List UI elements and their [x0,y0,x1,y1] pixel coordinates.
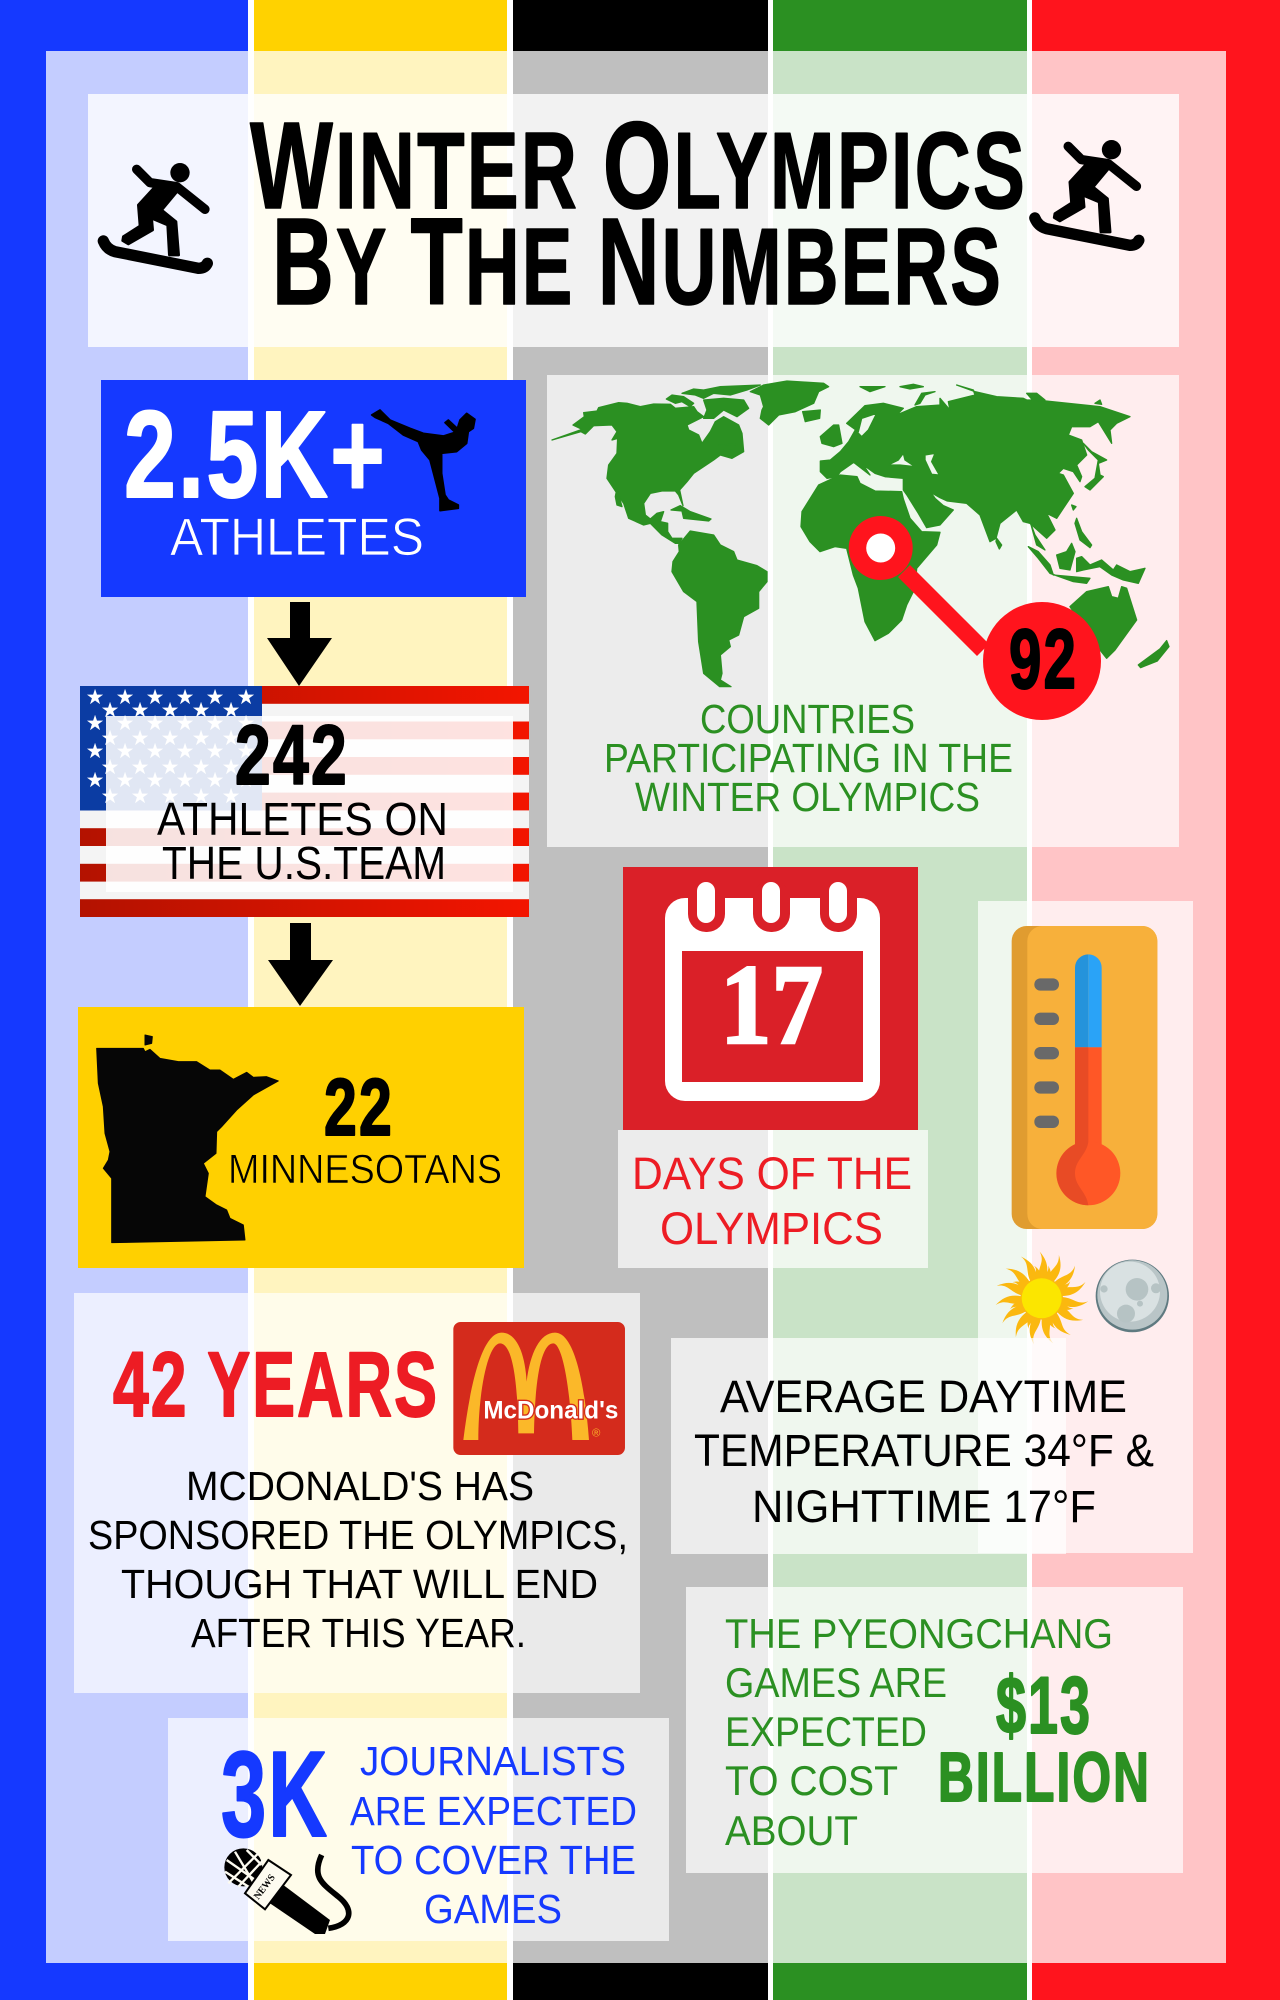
label: minnesotans: MINNESOTANS [228,1146,502,1192]
stat: 3K: 3K [221,1726,329,1862]
flag stars: ★ [131,726,149,750]
flag stars [86,685,255,808]
icon: thermometer [1012,926,1157,1229]
flag stars: ★ [146,768,164,792]
label: temperature text: AVERAGE DAYTIME [720,1371,1127,1422]
flag stars: ★ [206,768,224,792]
flag stars: ★ [161,698,179,722]
stat: 242: 242 [235,708,349,802]
flag stars: ★ [222,698,240,722]
flag stars: ★ [146,711,164,735]
body text: mcdonald's: MCDONALD'S HAS [186,1463,534,1509]
label: athletes: ATHLETES [170,508,424,567]
panel: us team flag [80,685,529,917]
body text: cost: EXPECTED [725,1708,927,1755]
arrow: US team to Minnesotans [268,923,333,1006]
body text: cost: THE PYEONGCHANG [725,1610,1113,1657]
flag stars: ★ [222,755,240,779]
icon: minnesota map [97,1035,278,1243]
icon: mcdonald's logo [453,1322,625,1455]
label: temperature text: TEMPERATURE 34°F & [694,1425,1154,1476]
flag stars: ★ [116,739,134,763]
flag stars: ★ [146,685,164,709]
title: line one: WINTER OLYMPICS [250,98,1027,235]
flag stars: ★ [116,768,134,792]
flag stars: ★ [101,698,119,722]
label: athletes on the us team [157,793,448,889]
flag stars: ★ [116,711,134,735]
panel: title [88,94,1179,347]
stat: 92: 92 [1009,612,1078,706]
body text: journalists: GAMES [424,1886,562,1932]
label: days of the olympics [632,1148,912,1254]
label: athletes on the us team: ATHLETES ON [157,793,448,845]
panel: average temperature [671,1338,1154,1554]
flag stars: ★ [176,711,194,735]
body text: journalists: TO COVER THE [351,1837,636,1883]
flag stars: ★ [161,755,179,779]
body text: cost: ABOUT [725,1807,858,1854]
flag stars: ★ [86,768,104,792]
world map [552,381,1169,687]
body text: mcdonald's: AFTER THIS YEAR. [191,1610,526,1656]
panel: mcdonald's sponsorship [74,1293,640,1693]
body text: mcdonald's: THOUGH THAT WILL END [121,1561,598,1607]
flag stars: ★ [237,739,255,763]
flag stars: ★ [176,685,194,709]
icon: figure skater [372,410,475,511]
label: athletes on the us team: THE U.S.TEAM [162,837,446,889]
stat: $13 billion: BILLION [938,1738,1151,1816]
stat: 2.5K+: 2.5K+ [124,387,387,524]
panel: temperature background [978,901,1193,1553]
icon: mcdonald's logo: McDonald's [483,1397,618,1424]
flag stars: ★ [176,739,194,763]
icon: mcdonald's logo: ® [592,1428,601,1440]
flag stars: ★ [192,698,210,722]
label: countries participating: COUNTRIES [700,696,915,742]
stat: 42 years: 42 YEARS [113,1334,439,1436]
label: days of the olympics: DAYS OF THE [632,1148,912,1199]
panel: cost [686,1587,1183,1873]
map pin and connector [849,516,1101,720]
body text: journalists [350,1738,637,1932]
stat: 17: 17 [720,941,823,1068]
panel: athletes [101,380,526,597]
icon: moon [1096,1260,1169,1332]
label: countries participating: PARTICIPATING IN THE [604,735,1013,781]
icon: snowboarder right [1035,140,1139,245]
flag stars: ★ [222,784,240,808]
stat: 22: 22 [324,1063,394,1153]
flag stars: ★ [101,755,119,779]
body text: mcdonald's [88,1463,628,1656]
body text: journalists: ARE EXPECTED [350,1788,637,1834]
flag stars: ★ [222,726,240,750]
icon: calendar [665,880,880,1101]
label: temperature text: NIGHTTIME 17°F [752,1481,1096,1532]
flag stars: ★ [206,739,224,763]
flag stars: ★ [237,685,255,709]
panel: minnesotans [78,1007,524,1268]
flag stars: ★ [176,768,194,792]
flag stars: ★ [101,726,119,750]
flag stars: ★ [192,726,210,750]
label: days of the olympics: OLYMPICS [660,1203,883,1254]
flag stars: ★ [86,711,104,735]
panel: days of the olympics [618,867,928,1268]
stat: $13 billion: $13 [996,1661,1092,1751]
icon: snowboarder left [103,163,207,268]
flag stars: ★ [146,739,164,763]
flag stars: ★ [131,755,149,779]
body text: mcdonald's: SPONSORED THE OLYMPICS, [88,1512,628,1558]
flag stars: ★ [161,784,179,808]
panel: countries [547,375,1179,847]
flag stars: ★ [237,768,255,792]
flag stars: ★ [192,784,210,808]
label: countries participating: WINTER OLYMPICS [635,774,980,820]
icon: news microphone [224,1848,349,1934]
flag stars: ★ [86,739,104,763]
icon: news microphone: NEWS [252,1872,278,1902]
label: temperature text [694,1371,1154,1532]
body text: cost: TO COST [725,1757,898,1804]
flag stars: ★ [86,685,104,709]
body text: cost [725,1610,1113,1854]
flag stars: ★ [131,698,149,722]
flag stars: ★ [206,711,224,735]
body text: journalists: JOURNALISTS [360,1738,626,1784]
flag stars: ★ [131,784,149,808]
flag stars: ★ [206,685,224,709]
title: line two: BY THE NUMBERS [272,194,1003,331]
icon: sun [995,1252,1088,1345]
flag stars: ★ [192,755,210,779]
flag stars: ★ [237,711,255,735]
flag stars: ★ [161,726,179,750]
arrow: athletes to US team [267,602,332,686]
flag stars: ★ [116,685,134,709]
panel: journalists [168,1718,669,1941]
label: countries participating [604,696,1013,820]
stat: $13 billion [938,1661,1151,1816]
body text: cost: GAMES ARE [725,1659,947,1706]
flag stars: ★ [101,784,119,808]
